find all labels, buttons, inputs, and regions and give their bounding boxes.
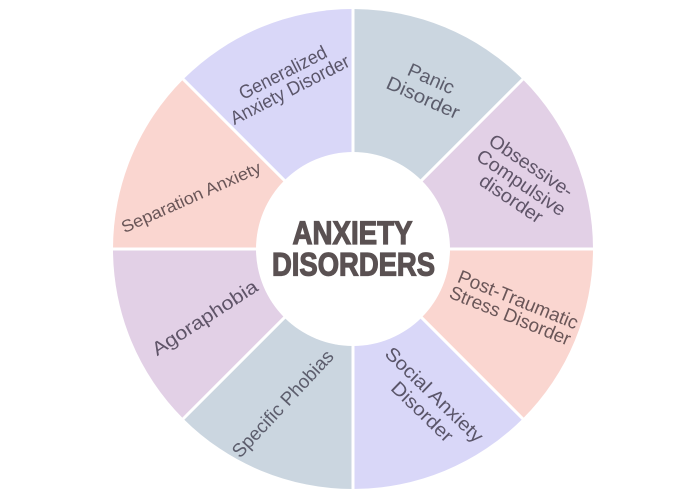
label: Obsessive-Compulsive disorder — [472, 131, 577, 229]
label: Obsessive-Compulsive disorder: Compulsive — [472, 146, 569, 221]
title: Anxiety Disorders — [272, 215, 435, 282]
title: Anxiety Disorders: DISORDERS — [272, 246, 435, 282]
title: Anxiety Disorders: ANXIETY — [292, 215, 412, 251]
center circle — [256, 152, 450, 346]
label: Panic Disorder — [383, 60, 463, 124]
label: Generalized Anxiety Disorder: Anxiety Disorder — [227, 51, 354, 130]
label: Obsessive-Compulsive disorder: Obsessive- — [485, 131, 577, 202]
label: Obsessive-Compulsive disorder: disorder — [475, 171, 547, 229]
segment: Social Anxiety Disorder — [353, 249, 523, 489]
segment: Generalized Anxiety Disorder — [183, 9, 354, 249]
label: Specific Phobias: Specific Phobias — [228, 346, 338, 462]
segment: Panic Disorder — [353, 9, 523, 249]
label: Post-Traumatic Stress Disorder: Post-Traumatic — [455, 267, 581, 334]
segment: Specific Phobias — [183, 249, 353, 489]
segment: Post-Traumatic Stress Disorder — [353, 249, 593, 419]
label: Agoraphobia: Agoraphobia — [148, 276, 263, 360]
segment: Obsessive-Compulsive disorder — [353, 79, 593, 249]
segment: Separation Anxiety — [113, 79, 353, 249]
label: Generalized Anxiety Disorder: Generalized — [236, 42, 331, 105]
label: Social Anxiety Disorder: Disorder — [386, 378, 458, 448]
label: Panic Disorder: Panic — [404, 60, 457, 99]
label: Panic Disorder: Disorder — [383, 73, 463, 124]
label: Social Anxiety Disorder: Social Anxiety — [380, 343, 487, 448]
segment: Agoraphobia — [113, 249, 353, 419]
label: Post-Traumatic Stress Disorder: Stress Disorder — [446, 283, 574, 351]
label: Separation Anxiety: Separation Anxiety — [118, 158, 265, 237]
